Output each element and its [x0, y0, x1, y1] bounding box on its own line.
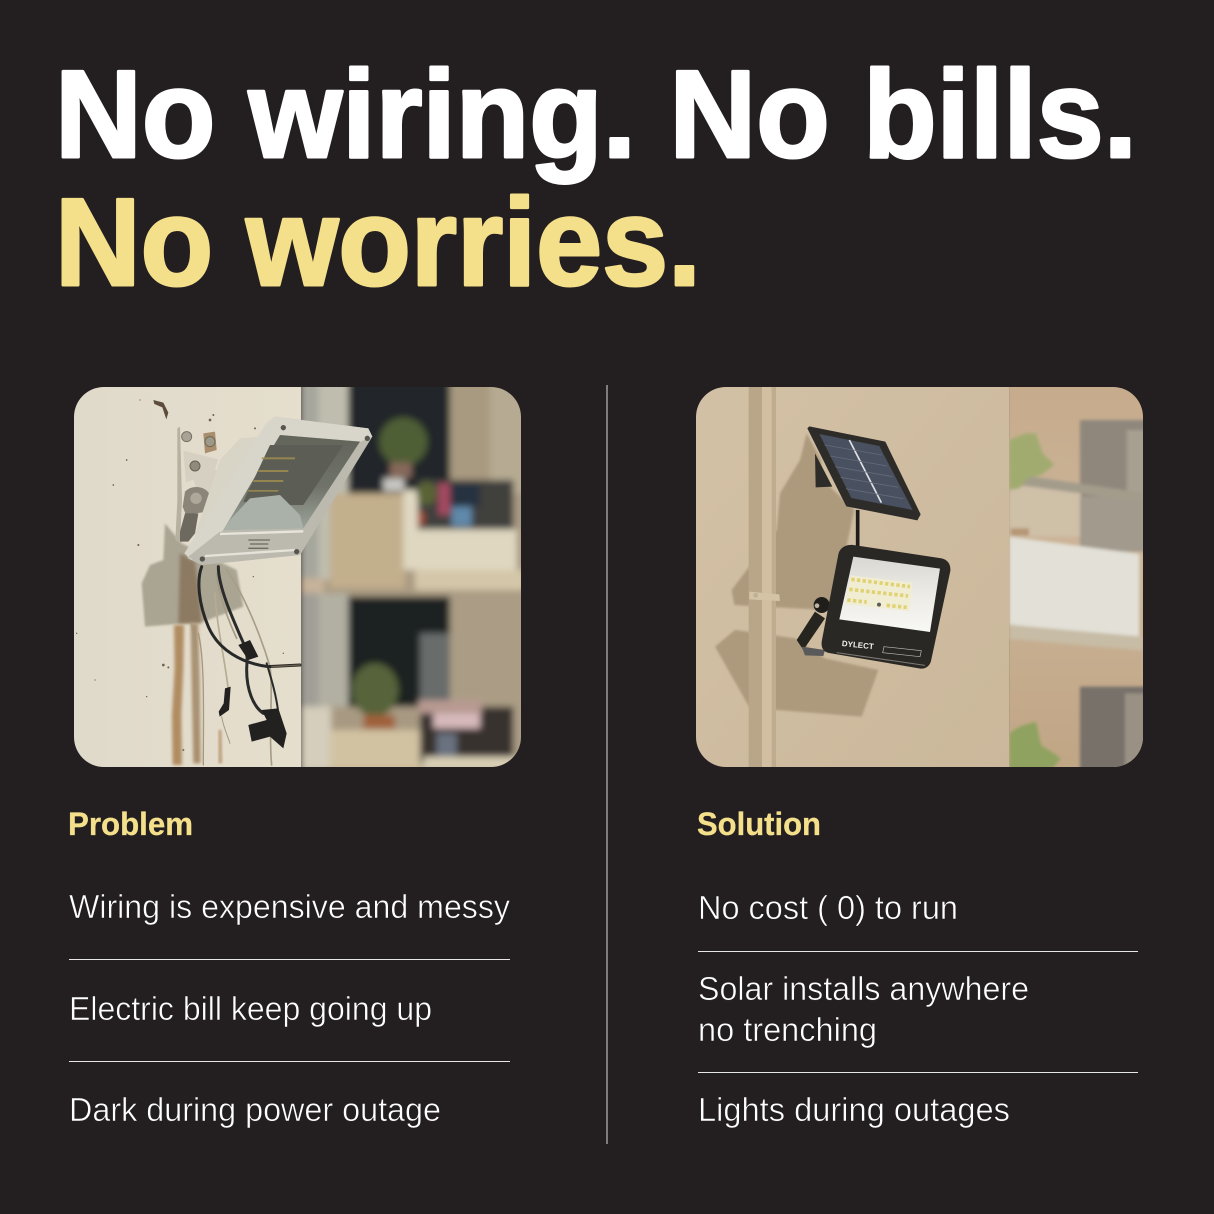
mounting bracket	[176, 426, 218, 542]
infographic canvas	[62, 66, 1143, 1144]
text: solar installs	[698, 971, 1029, 1049]
light shadow on wall	[142, 523, 243, 627]
blurred apartment background	[301, 387, 521, 767]
title line 1: No wiring. No bills.	[55, 46, 1137, 184]
wall shadow of light	[715, 433, 878, 717]
drain pipe	[749, 380, 780, 780]
housing	[822, 545, 950, 669]
text: no cost: No cost ( 0) to run	[698, 890, 958, 927]
dangling wires	[192, 567, 300, 765]
brand text: DYLECT	[841, 639, 874, 651]
mount arm	[797, 612, 825, 650]
text: solar installs: no trenching	[698, 1012, 877, 1049]
text: electric bill: Electric bill keep going up	[69, 991, 432, 1028]
photo: solar flood light	[690, 380, 1147, 780]
solar panel	[807, 426, 921, 546]
wall stains and specks	[76, 399, 284, 751]
text: outage: Dark during power outage	[69, 1092, 441, 1129]
photo: old wired flood light	[70, 380, 533, 780]
blurred balcony background	[1009, 380, 1147, 780]
rust streak	[172, 553, 222, 765]
divider between columns	[606, 385, 608, 1144]
electrical tape	[219, 640, 287, 748]
text: wiring: Wiring is expensive and messy	[69, 889, 510, 926]
heading: solution: Solution	[697, 806, 821, 842]
title	[55, 46, 1137, 312]
panel: problem	[68, 806, 510, 1129]
weathered wall	[70, 380, 301, 780]
painted wall	[690, 380, 1009, 780]
panel: solution	[697, 806, 1138, 1129]
pipe clamp	[749, 592, 780, 601]
panel cable	[856, 510, 860, 546]
text: lights: Lights during outages	[698, 1092, 1010, 1129]
solar flood light	[797, 545, 950, 669]
heading: problem: Problem	[68, 806, 193, 842]
title line 2: No worries.	[55, 174, 701, 312]
text: solar installs: Solar installs anywhere	[698, 971, 1029, 1008]
flood light housing	[184, 417, 372, 565]
